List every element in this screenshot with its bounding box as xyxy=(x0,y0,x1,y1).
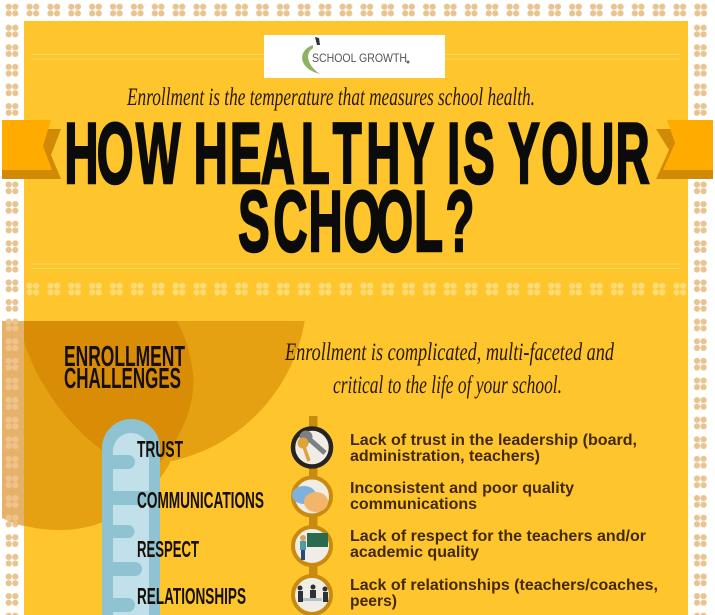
thermometer xyxy=(102,419,160,615)
title line 1: HOW xyxy=(64,105,181,202)
title line 1: YOUR xyxy=(508,105,650,202)
thermometer labels: RELATIONSHIPS xyxy=(137,583,246,609)
subheading script text: critical to the life of your school. xyxy=(333,372,562,399)
challenge: relationships: Lack of relationships (teachers/coaches, xyxy=(350,577,658,594)
challenge: respect: academic quality xyxy=(350,544,479,561)
challenge: communications xyxy=(350,480,574,513)
timeline connector xyxy=(309,416,318,615)
icon: people at a table xyxy=(293,576,331,614)
thermometer labels: TRUST xyxy=(137,436,183,462)
challenge: relationships xyxy=(350,577,658,610)
challenge: respect: Lack of respect for the teachers and/or xyxy=(350,528,646,545)
background circles xyxy=(2,321,305,530)
thermometer labels: RESPECT xyxy=(137,536,199,562)
logo: School Growth xyxy=(264,35,445,78)
challenge: relationships: peers) xyxy=(350,593,397,610)
ribbon: left xyxy=(2,120,61,179)
challenge: respect xyxy=(350,528,646,561)
challenge: communications: Inconsistent and poor quality xyxy=(350,480,574,497)
thermometer labels: COMMUNICATIONS xyxy=(137,487,264,513)
heading: enrollment challenges: ENROLLMENT xyxy=(64,341,185,373)
title line 2: ? xyxy=(446,173,474,270)
icon: teacher at blackboard xyxy=(293,527,331,565)
challenge: communications: communications xyxy=(350,496,477,513)
thermometer labels xyxy=(137,436,264,609)
challenge: trust xyxy=(350,432,637,465)
light dotted divider xyxy=(23,279,688,299)
title line 1: IS xyxy=(447,105,495,202)
double rule beside logo xyxy=(32,54,680,59)
icon: speech bubbles xyxy=(292,478,331,516)
subheading script text xyxy=(284,339,614,399)
title line 2: SCHOOL xyxy=(238,173,443,270)
ribbon: right xyxy=(656,120,713,179)
heading: enrollment challenges xyxy=(64,341,185,395)
challenge: trust: administration, teachers) xyxy=(350,448,540,465)
title line 1: HEALTHY xyxy=(194,105,434,202)
double rule under title xyxy=(32,264,680,268)
title line 1 xyxy=(64,105,650,202)
logo: School Growth: SCHOOL GROWTH xyxy=(312,51,407,65)
icon: keys xyxy=(293,428,331,466)
heading: enrollment challenges: CHALLENGES xyxy=(64,363,181,395)
tagline: Enrollment is the temperature that measures school health. xyxy=(126,84,535,111)
challenge: trust: Lack of trust in the leadership (board, xyxy=(350,432,637,449)
